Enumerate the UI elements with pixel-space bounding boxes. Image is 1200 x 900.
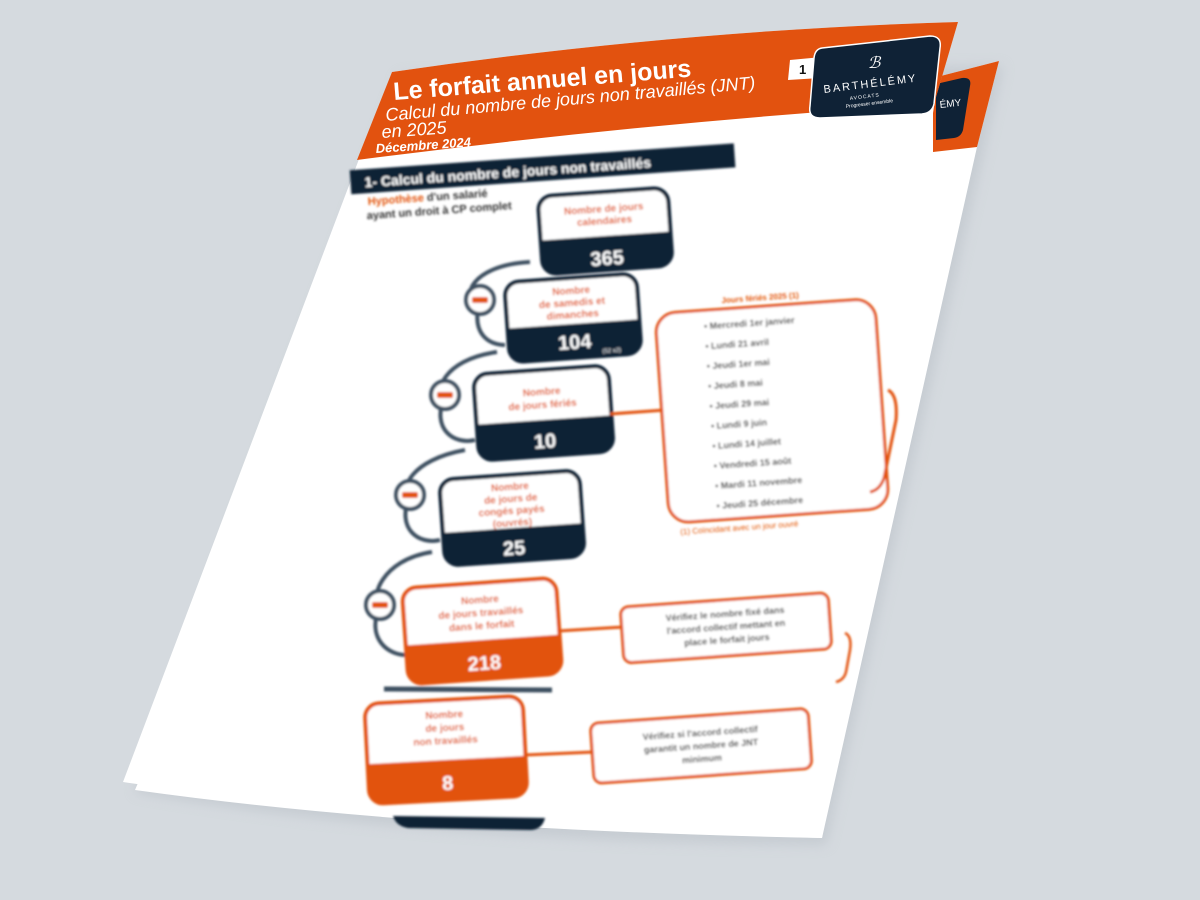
box: 218: de jours travaillés: [438, 605, 524, 622]
box: 25: (ouvrés): [492, 517, 533, 530]
page number: [788, 57, 822, 80]
hypothesis text: ayant un droit à CP complet: [366, 200, 512, 222]
holiday list: • Mercredi 1er janvier: [704, 315, 795, 331]
callout 2: Vérifiez si l'accord collectif: [642, 724, 759, 742]
box: 104: dimanches: [546, 308, 600, 323]
logo: Progresser ensemble: [846, 98, 894, 110]
holiday list: • Vendredi 15 août: [713, 456, 792, 471]
box: 25: Nombre: [491, 481, 530, 494]
logo: AVOCATS: [850, 92, 880, 102]
holiday list: [654, 285, 890, 537]
box: 10: [473, 365, 614, 461]
callout 1: l'accord collectif mettant en: [666, 618, 785, 636]
body content: [350, 143, 896, 830]
bracket 2: [836, 633, 850, 682]
section heading bar: 1- Calcul du nombre de jours non travaillés: [364, 154, 652, 190]
holiday list: • Jeudi 25 décembre: [716, 495, 803, 511]
header band: en 2025: [381, 117, 448, 142]
box: 10: Nombre: [522, 386, 561, 399]
holiday list: • Lundi 21 avril: [705, 337, 769, 351]
date: Décembre 2024: [375, 134, 472, 156]
page shadow: [135, 66, 1003, 845]
logo: ℬ: [868, 55, 882, 72]
box: 365: 365: [590, 247, 625, 271]
hypothesis text: Hypothèse d'un salarié: [367, 188, 488, 208]
box: 25: [439, 470, 585, 566]
box: 104: (52 x2): [602, 348, 621, 355]
callout 2: minimum: [682, 753, 722, 765]
callout 1: [620, 593, 832, 663]
holiday list: (1) Coïncidant avec un jour ouvré: [680, 519, 799, 537]
box: 8: non travaillés: [413, 734, 478, 749]
callout 2: garantit un nombre de JNT: [644, 737, 759, 755]
box: 104: Nombre: [552, 285, 591, 298]
box: 365: [538, 188, 673, 274]
holiday list: • Jeudi 1er mai: [706, 357, 770, 371]
box: 10: de jours fériés: [508, 398, 577, 413]
front page: [123, 22, 958, 838]
box: 218: [402, 578, 562, 684]
box: 218: 218: [467, 652, 502, 676]
box: 10: 10: [533, 430, 557, 454]
box: 25: de jours de: [484, 492, 538, 507]
holiday list: Jours fériés 2025 (1): [721, 291, 799, 305]
box: 8: de jours: [425, 722, 465, 735]
back page: ÉMY: [939, 96, 962, 111]
title: Le forfait annuel en jours: [392, 55, 692, 106]
back page header: [933, 61, 999, 152]
box: 365: calendaires: [577, 214, 633, 229]
header band: [357, 22, 958, 160]
bracket 1: [870, 390, 896, 492]
holiday list: • Mardi 11 novembre: [715, 475, 802, 491]
back page logo: [936, 78, 970, 140]
box: 25: congés payés: [478, 504, 545, 519]
callout 1: place le forfait jours: [684, 632, 770, 648]
box: 25: 25: [502, 537, 526, 561]
holiday list: • Lundi 14 juillet: [712, 436, 781, 451]
hypothesis text: [365, 186, 512, 222]
box: 365: Nombre de jours: [564, 201, 644, 218]
minus icons: [366, 286, 494, 619]
subtitle: Calcul du nombre de jours non travaillés (JNT): [385, 73, 756, 125]
connectors: [375, 262, 530, 655]
box: 218: Nombre: [461, 594, 500, 607]
logo: [810, 36, 940, 118]
logo: BARTHÉLÉMY: [823, 72, 918, 96]
holiday list: • Jeudi 29 mai: [709, 397, 769, 411]
divider: [384, 689, 552, 690]
partial box at bottom: [393, 816, 545, 830]
box: 104: de samedis et: [539, 296, 606, 311]
connector lines to callouts: [525, 410, 665, 755]
box: 104: [504, 273, 642, 362]
holiday list: • Jeudi 8 mai: [708, 377, 763, 391]
box: 8: 8: [442, 773, 454, 795]
box: 218: dans le forfait: [449, 619, 516, 634]
page number: 1: [799, 62, 806, 77]
box: 8: [364, 696, 528, 804]
callout 1: Vérifiez le nombre fixé dans: [665, 605, 785, 623]
box: 8: Nombre: [425, 709, 464, 722]
callout 2: [590, 708, 812, 783]
holiday list: • Lundi 9 juin: [711, 417, 767, 431]
back page: [135, 61, 999, 838]
section heading bar: [350, 143, 735, 194]
box: 104: 104: [557, 331, 593, 355]
